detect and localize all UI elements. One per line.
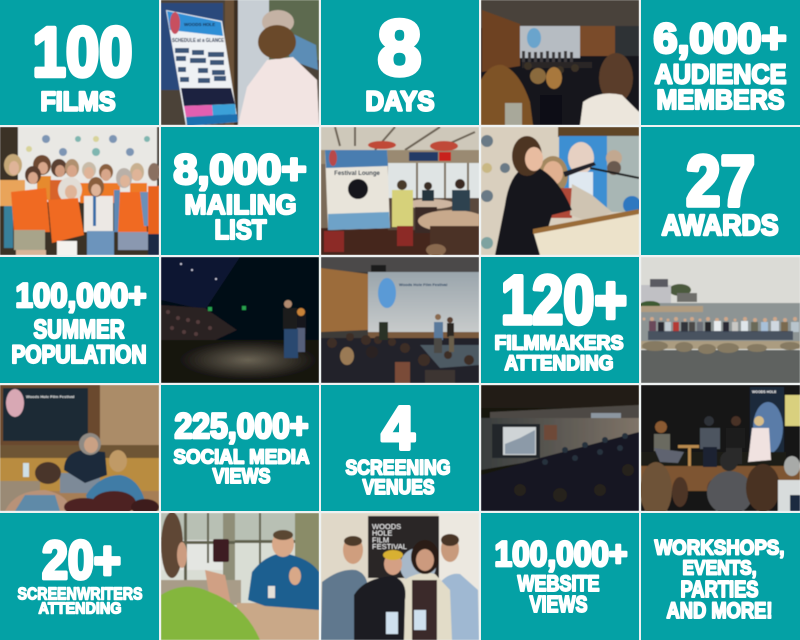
banner text: FESTIVAL bbox=[372, 542, 407, 551]
stat label: views: VIEWS bbox=[530, 591, 588, 617]
photo: speaker at workshop bbox=[0, 385, 159, 516]
stat label: list: LIST bbox=[214, 214, 266, 245]
panel: 225,000+ social media views bbox=[161, 385, 319, 511]
photo: filmmakers on stage in auditorium bbox=[481, 0, 639, 125]
label: and more: AND MORE! bbox=[666, 598, 772, 623]
stat label: attending: ATTENDING bbox=[504, 352, 614, 375]
panel: 4 screening venues bbox=[321, 385, 479, 511]
label: workshops: WORKSHOPS, bbox=[654, 536, 784, 560]
photo: filming a testimonial on a phone bbox=[160, 512, 319, 640]
panel: 100 films bbox=[0, 0, 159, 125]
photo: festival schedule poster: SCHEDULE at a GLANCE bbox=[172, 38, 225, 44]
stat label: population: POPULATION bbox=[12, 341, 146, 369]
label: events: EVENTS, bbox=[682, 558, 756, 580]
stat number: 120+: 120+ bbox=[501, 262, 627, 338]
group of people standing on jetty bbox=[642, 317, 799, 340]
photo: two speakers on dark stage bbox=[161, 257, 319, 383]
stat number: 27: 27 bbox=[686, 142, 755, 222]
stat label: days: DAYS bbox=[366, 86, 434, 116]
stat label: audience: AUDIENCE bbox=[654, 58, 786, 90]
stat number: 100: 100 bbox=[32, 13, 132, 91]
banner text: FILM bbox=[372, 535, 389, 544]
panel: workshops, events, parties and more bbox=[641, 513, 800, 640]
stat number: 8: 8 bbox=[378, 4, 422, 92]
stat label: website: WEBSITE bbox=[518, 571, 600, 596]
photo: festival schedule poster bbox=[161, 0, 319, 126]
photo: filmmakers Q and A in theatre bbox=[321, 257, 479, 383]
stat number: 100,000+: 100,000+ bbox=[494, 535, 628, 574]
banner text: HOLE bbox=[372, 529, 392, 538]
banner text: WOODS HOLE bbox=[752, 390, 777, 394]
photo: volunteers in orange shirts bbox=[0, 127, 160, 255]
panel: 8,000+ mailing list bbox=[161, 127, 319, 255]
banner text: WOODS bbox=[372, 522, 401, 531]
stat label: social media: SOCIAL MEDIA bbox=[174, 446, 310, 468]
stat label: attending: ATTENDING bbox=[38, 600, 122, 618]
stat label: screenwriters: SCREENWRITERS bbox=[18, 584, 142, 604]
panel: 20+ screenwriters attending bbox=[0, 513, 159, 640]
stat label: filmmakers: FILMMAKERS bbox=[494, 332, 624, 354]
stat number: 8,000+: 8,000+ bbox=[174, 146, 306, 192]
stat number: 100,000+: 100,000+ bbox=[16, 277, 146, 315]
poster text: WOODS HOLE bbox=[184, 22, 215, 27]
label: parties: PARTIES bbox=[680, 576, 758, 602]
stat number: 4: 4 bbox=[382, 394, 415, 462]
panel: 100,000+ website views bbox=[481, 513, 639, 640]
lounge sign text: Festival Lounge bbox=[334, 171, 380, 177]
panel: 120+ filmmakers attending bbox=[481, 257, 639, 383]
stat label: summer: SUMMER bbox=[34, 314, 125, 344]
stat label: views: VIEWS bbox=[212, 465, 270, 488]
stat label: mailing: MAILING bbox=[184, 189, 296, 220]
photo: festival lounge bbox=[321, 127, 486, 256]
stat number: 225,000+: 225,000+ bbox=[174, 407, 308, 446]
panel: 6,000+ audience members bbox=[641, 0, 800, 125]
stat label: films: FILMS bbox=[40, 86, 116, 116]
stat label: screening: SCREENING bbox=[346, 456, 450, 480]
stat label: venues: VENUES bbox=[362, 476, 434, 499]
screen title text: Woods Hole Film Festival bbox=[399, 282, 447, 287]
photo: group on stone jetty bbox=[640, 257, 800, 383]
photo: packed cinema bbox=[481, 385, 639, 511]
screen title text: Woods Hole Film Festival bbox=[26, 394, 74, 399]
panel: 8 days bbox=[321, 0, 479, 125]
photo: panel discussion on stage bbox=[640, 385, 800, 518]
stat number: 20+: 20+ bbox=[42, 530, 121, 590]
stat label: members: MEMBERS bbox=[656, 84, 784, 115]
photo: four festival guests bbox=[321, 513, 479, 640]
panel: 27 awards bbox=[641, 127, 800, 255]
stat label: awards: AWARDS bbox=[662, 210, 778, 242]
stat number: 6,000+: 6,000+ bbox=[654, 14, 786, 62]
jetty rocks bbox=[641, 341, 800, 354]
panel: 100,000+ summer population bbox=[0, 257, 159, 383]
photo: two women hugging at podium bbox=[481, 127, 641, 255]
